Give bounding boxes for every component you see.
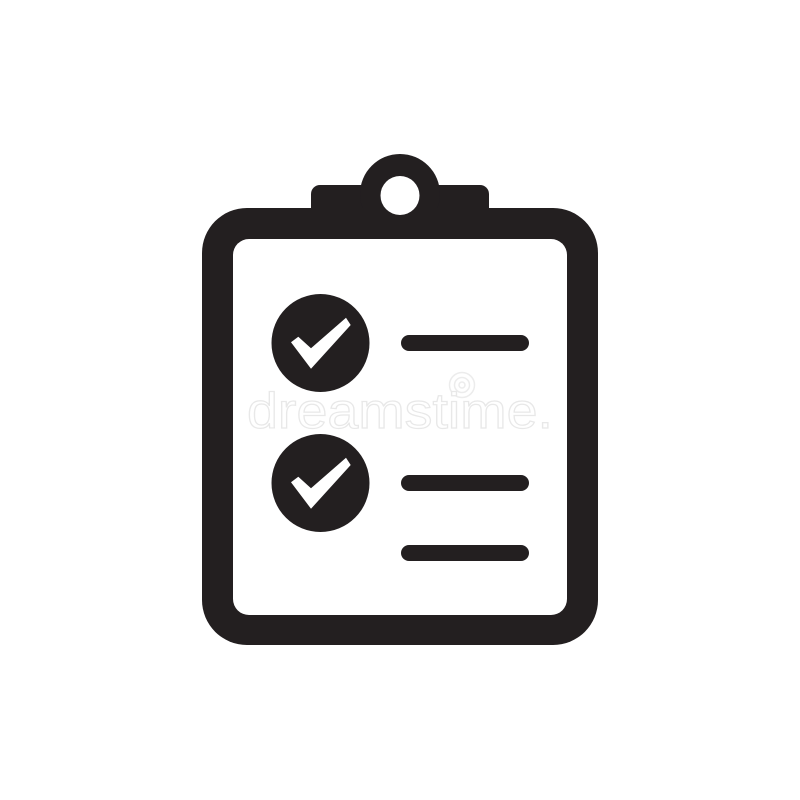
checklist item 1: line: [401, 335, 529, 351]
checklist item 1: check badge: [272, 294, 370, 392]
checklist item 3: line: [401, 545, 529, 561]
watermark: dreamstime.: [247, 383, 553, 439]
clipboard clip: [311, 154, 489, 239]
checklist item 2: check badge: [272, 434, 370, 532]
clipboard board: [202, 208, 598, 645]
checklist item 2: line: [401, 475, 529, 491]
